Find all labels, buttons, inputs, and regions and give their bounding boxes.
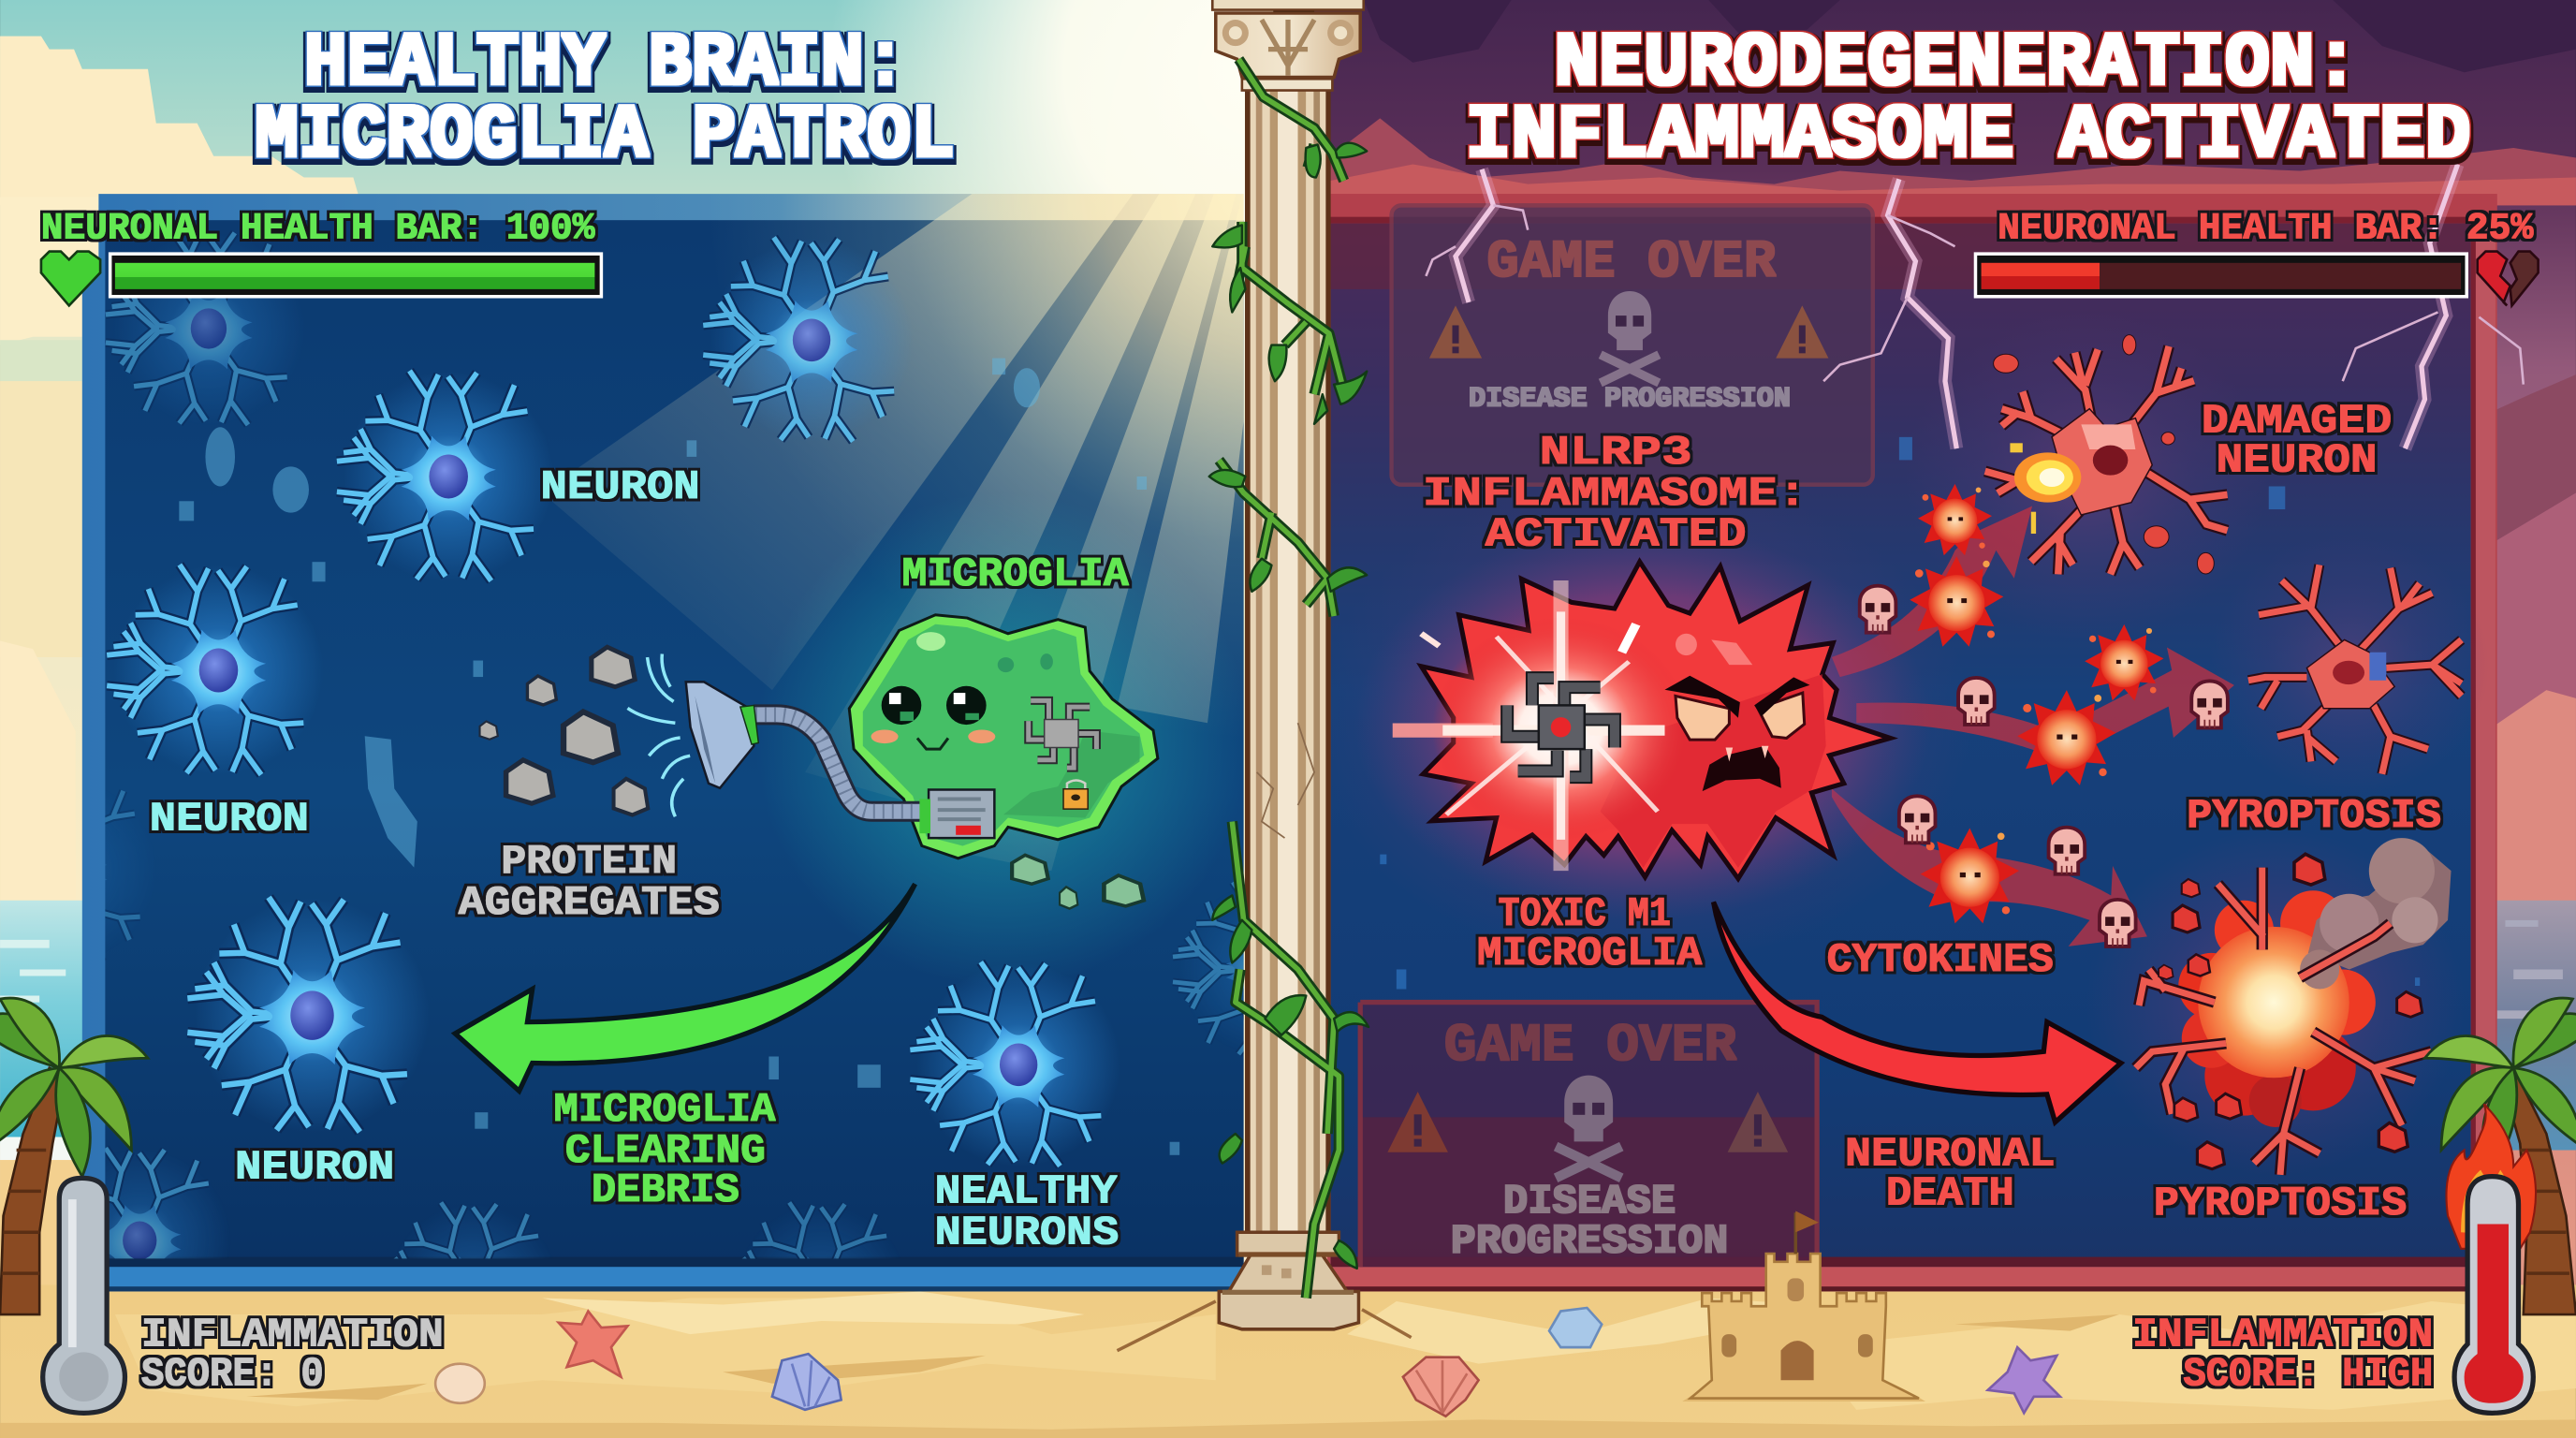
label: neuronal death: NEURONAL (1845, 1131, 2056, 1178)
background neuron: top left faded (105, 230, 287, 427)
background: sunny sky (0, 0, 1273, 1314)
vines (1209, 59, 1368, 1298)
warning triangle right (1728, 1092, 1788, 1152)
toxic M1 microglia (1393, 562, 1891, 879)
shell: cream (435, 1364, 485, 1403)
health label: healthy: NEURONAL HEALTH BAR: 100% (41, 207, 595, 249)
nucleus (2093, 446, 2128, 476)
soma (2306, 639, 2394, 709)
label: neuron: NEURON (235, 1144, 394, 1191)
health bar: damaged (1975, 254, 2466, 297)
lightning bolts (1426, 165, 2524, 448)
warning triangle right (1776, 305, 1828, 359)
neuron: upper (336, 368, 542, 584)
label: protein aggregates: PROTEIN (501, 839, 677, 886)
label: protein aggregates: AGGREGATES (459, 880, 720, 927)
label: toxic M1 microglia: MICROGLIA (1477, 931, 1703, 977)
damaged neuron 2 (2248, 565, 2462, 774)
label: pyroptosis: PYROPTOSIS (2154, 1181, 2407, 1227)
label: pyroptosis: PYROPTOSIS (2187, 793, 2441, 840)
panel: healthy brain (82, 194, 1244, 1292)
cytokine burst 1 (1918, 484, 1992, 555)
disease progression text: DISEASE PROGRESSION (1469, 382, 1791, 414)
toxic M1 microglia glow (1355, 526, 1930, 920)
icon: broken heart (2478, 252, 2539, 305)
neuron: lower left (187, 894, 417, 1135)
title: healthy brain: HEALTHY BRAIN: (304, 22, 907, 108)
label: NLRP3 inflammasome activated (1423, 430, 1808, 559)
microglia body (849, 615, 1158, 858)
game over panel: top (1392, 205, 1873, 485)
cytokine flow arrow: to pyroptosis (1832, 788, 2147, 946)
label: NLRP3 inflammasome activated: NLRP3 (1540, 430, 1692, 477)
label: inflammation score 0 (141, 1312, 444, 1398)
palm tree: right (2424, 998, 2576, 1314)
receptor icon (1029, 700, 1096, 768)
skull particle 3 (2191, 681, 2228, 727)
burst glow (1432, 616, 1690, 841)
starfish: coral (559, 1312, 627, 1377)
debris (1994, 335, 2214, 574)
receptor icon (1507, 678, 1615, 777)
label: healthy neurons (935, 1169, 1119, 1257)
label: microglia clearing debris: CLEARING (565, 1128, 766, 1175)
damaged neuron (1985, 335, 2228, 574)
flames over thermometer (2446, 1104, 2536, 1249)
warning triangle left (1429, 305, 1482, 359)
background neuron: bottom left (105, 1146, 215, 1258)
column shaft (1245, 82, 1331, 1240)
background neuron: bottom centre (741, 1201, 887, 1258)
impact flash (2010, 443, 2081, 534)
nucleus and hole (2333, 653, 2386, 684)
warning triangle left (1387, 1092, 1448, 1152)
game over text: GAME OVER (1444, 1016, 1736, 1076)
skull and crossbones (1556, 1076, 1621, 1178)
vacuum hose (754, 714, 922, 812)
label: neuronal death (1845, 1131, 2056, 1217)
blush and smile (871, 729, 995, 749)
skull particle 6 (2100, 900, 2136, 946)
dendrites (1985, 346, 2228, 574)
health bar: healthy (110, 254, 601, 297)
thermometer: right (2454, 1177, 2533, 1413)
arrow: microglia clearing debris (455, 884, 915, 1091)
background: sea (0, 901, 98, 1308)
label: microglia clearing debris: DEBRIS (592, 1167, 739, 1214)
label: microglia: MICROGLIA (902, 551, 1129, 598)
smoke cloud (2300, 838, 2452, 990)
pyroptosis explosion (2136, 838, 2452, 1175)
cytokine burst 4 (2017, 690, 2116, 785)
subtitle: inflammasome activated: INFLAMMASOME ACTIVATED (1466, 95, 2471, 180)
skull particle 2 (1958, 678, 1995, 725)
cytokine flow arrow: to second neuron (1856, 647, 2234, 761)
vacuum nozzle (686, 682, 758, 788)
protein aggregates clumps (480, 647, 648, 814)
label: damaged neuron: NEURON (2217, 438, 2378, 485)
highlights (1676, 634, 1752, 665)
vacuum box (919, 789, 994, 838)
cytokine burst 3 (2085, 624, 2163, 700)
cytokine burst 2 (1910, 556, 2003, 647)
skull and crossbones (1601, 291, 1659, 383)
skull particle 5 (2049, 828, 2085, 874)
cracks in sand at base (1117, 1301, 1412, 1351)
label: cytokines: CYTOKINES (1827, 937, 2054, 984)
spiky body (1421, 562, 1891, 879)
column capital (1212, 0, 1364, 91)
label: inflammation score high: SCORE: HIGH (2183, 1351, 2433, 1398)
shell: blue (1549, 1308, 1602, 1347)
subtitle: microglia patrol: MICROGLIA PATROL (255, 95, 955, 180)
label: damaged neuron: DAMAGED (2202, 399, 2392, 446)
panel: neurodegeneration (1314, 194, 2497, 1291)
health label: damaged: NEURONAL HEALTH BAR: 25% (1998, 207, 2534, 249)
dendrites (2248, 565, 2462, 774)
skull particle 1 (1860, 586, 1895, 633)
starfish: purple (1988, 1347, 2060, 1413)
thermometer: left (43, 1178, 124, 1413)
palm tree: left (0, 998, 148, 1314)
label: healthy neurons: NEALTHY (935, 1169, 1118, 1216)
inner shading (1601, 674, 1826, 868)
broken dendrites (2136, 868, 2431, 1175)
label: inflammation score 0: SCORE: 0 (141, 1351, 324, 1398)
label: neuron: NEURON (150, 796, 309, 843)
cytokine flow arrow: to damaged neuron (1832, 506, 2032, 677)
microglia inner body (863, 624, 1144, 845)
background neuron: right edge (1172, 882, 1244, 1056)
progression text: PROGRESSION (1451, 1218, 1728, 1265)
title: neurodegeneration: NEURODEGENERATION: (1554, 22, 2359, 108)
label: inflammation score 0: INFLAMMATION (141, 1312, 444, 1358)
shell: lavender (772, 1354, 842, 1410)
sand castle (1682, 1211, 1925, 1401)
background: sand beach (0, 1284, 2576, 1438)
neuron: top in sunlight (702, 234, 898, 444)
microglia with vacuum (686, 615, 1158, 858)
eyes (882, 686, 987, 725)
label: damaged neuron (2202, 399, 2392, 485)
game over text: GAME OVER (1486, 232, 1777, 292)
background neuron: lower left edge (105, 790, 140, 961)
label: microglia clearing debris (554, 1087, 776, 1214)
label: NLRP3 inflammasome activated: INFLAMMASOME: (1423, 471, 1808, 518)
label: protein aggregates (459, 839, 720, 927)
digested debris (1012, 855, 1144, 909)
column (1117, 0, 1412, 1351)
flying fragments (2159, 854, 2422, 1169)
label: neuronal death: DEATH (1886, 1170, 2014, 1217)
label: toxic M1 microglia: TOXIC M1 (1499, 891, 1671, 938)
suction lines (627, 654, 690, 816)
neuron: lower right (910, 959, 1110, 1168)
skull particle 4 (1899, 796, 1935, 843)
column base (1219, 1232, 1358, 1329)
icon: green heart (41, 252, 100, 305)
label: NLRP3 inflammasome activated: ACTIVATED (1486, 512, 1747, 559)
angry eyes (1664, 676, 1809, 740)
disease text: DISEASE (1503, 1179, 1676, 1225)
arrow: neuronal death (1714, 902, 2121, 1123)
label: toxic M1 microglia (1477, 891, 1703, 977)
cytokine burst 5 (1921, 829, 2019, 923)
explosion fireball (2178, 890, 2376, 1127)
shell: pink (1403, 1357, 1479, 1416)
game over panel: bottom (1360, 1003, 1817, 1267)
label: inflammation score high: INFLAMMATION (2132, 1312, 2433, 1358)
soma (2052, 409, 2152, 515)
fanged mouth (1703, 746, 1781, 791)
label: inflammation score high (2132, 1312, 2433, 1398)
background neuron: bottom middle (393, 1201, 539, 1258)
label: microglia clearing debris: MICROGLIA (554, 1087, 776, 1134)
label: neuron: NEURON (540, 464, 700, 511)
label: healthy neurons: NEURONS (935, 1211, 1119, 1257)
background: storm sky (1314, 0, 2576, 1314)
neuron: middle left (107, 562, 313, 777)
neurons: healthy field (0, 217, 1352, 1389)
padlock (1063, 780, 1088, 809)
